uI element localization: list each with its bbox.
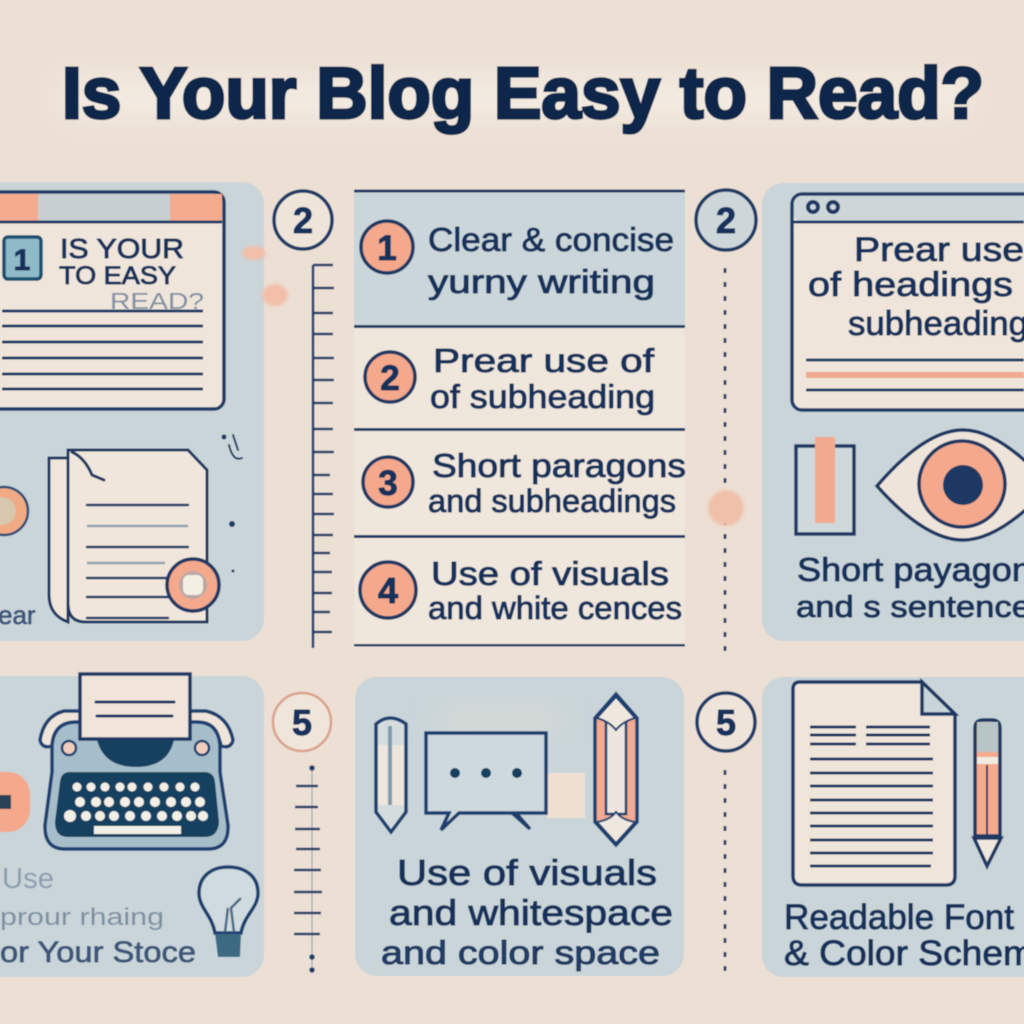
browser window illustration: subheading — [848, 305, 1024, 343]
step badge 5 right — [697, 693, 755, 751]
item 2: Prear use of — [433, 342, 655, 379]
item 1: Clear & concise — [428, 221, 674, 258]
text: visuals and whitespace: and color space — [381, 934, 660, 971]
ruler: upper left — [313, 265, 334, 648]
item 3: and subheadings — [428, 483, 676, 519]
text: readable font: & Color Schem — [784, 934, 1024, 973]
text: readable font: Readable Font — [784, 898, 1014, 937]
label: short paragraphs: Short payagon — [797, 551, 1024, 588]
item 2 — [365, 342, 655, 415]
item 3: Short paragons — [432, 447, 686, 484]
icon: side badge — [0, 772, 30, 832]
panel: top left — [0, 182, 264, 641]
accent dot: right — [708, 490, 744, 526]
icon: pencil — [376, 718, 406, 832]
browser window illustration: TO EASY — [59, 262, 176, 290]
icon: document — [793, 682, 955, 885]
text: readable font — [784, 898, 1024, 973]
icon: speech bubble — [426, 733, 585, 830]
dotted line: upper right — [724, 268, 726, 652]
item 1: 1 — [377, 229, 397, 268]
accent dot: left — [242, 246, 288, 306]
panel: bottom left — [0, 674, 264, 977]
faded labels: or Your Stoce — [0, 936, 196, 969]
step badge 2 left: 2 — [293, 200, 313, 241]
step badge 5 right: 5 — [716, 702, 736, 743]
item 1: yurny writing — [428, 263, 655, 300]
icon: document with badge — [49, 450, 219, 622]
dotted line: lower right — [724, 770, 726, 975]
panel: top right — [762, 183, 1024, 641]
icon: coin — [0, 487, 28, 535]
faded labels: Use — [2, 863, 54, 895]
icon: crystal — [595, 694, 637, 845]
item 4: 4 — [378, 570, 398, 611]
text: visuals and whitespace: Use of visuals — [397, 852, 657, 893]
item 1 — [361, 221, 674, 300]
panel: bottom right — [762, 677, 1024, 977]
faded labels: prour rhaing — [0, 904, 164, 931]
item 2: of subheading — [430, 378, 655, 415]
browser window illustration — [792, 194, 1024, 410]
label: sentences: and s sentence — [796, 589, 1024, 624]
icon: light bulb — [199, 867, 258, 957]
item 4: Use of visuals — [431, 555, 669, 592]
icon: pencil — [974, 720, 1001, 866]
browser window illustration: of headings — [808, 266, 1013, 304]
step badge 2 right — [696, 190, 756, 250]
icon: typewriter — [40, 674, 233, 849]
step badge 5 left — [273, 693, 331, 751]
ruler: lower left — [294, 766, 322, 972]
step badge 5 left: 5 — [292, 702, 312, 743]
icon: eye — [877, 430, 1024, 540]
browser window illustration — [0, 192, 224, 409]
step badge 2 right: 2 — [716, 200, 736, 241]
text: visuals and whitespace: and whitespace — [389, 892, 673, 933]
browser window illustration: 1 — [14, 244, 30, 277]
marks: stray specks — [222, 434, 242, 572]
text: visuals and whitespace — [381, 852, 673, 971]
panel: bottom centre — [355, 677, 684, 976]
item 2: 2 — [380, 359, 400, 398]
item 3: 3 — [378, 464, 398, 503]
browser window illustration: Prear use — [854, 231, 1024, 269]
step badge 2 left — [274, 191, 332, 249]
item 4 — [360, 555, 682, 626]
faded labels — [0, 863, 196, 969]
browser window illustration: IS YOUR — [60, 233, 184, 264]
title: Is Your Blog Easy to Read? — [62, 54, 984, 134]
item 3 — [363, 447, 686, 519]
icon: bookmark book — [796, 437, 854, 534]
panel: top centre — [354, 190, 686, 646]
item 4: and white cences — [428, 590, 682, 626]
browser window illustration: READ? — [110, 288, 204, 314]
